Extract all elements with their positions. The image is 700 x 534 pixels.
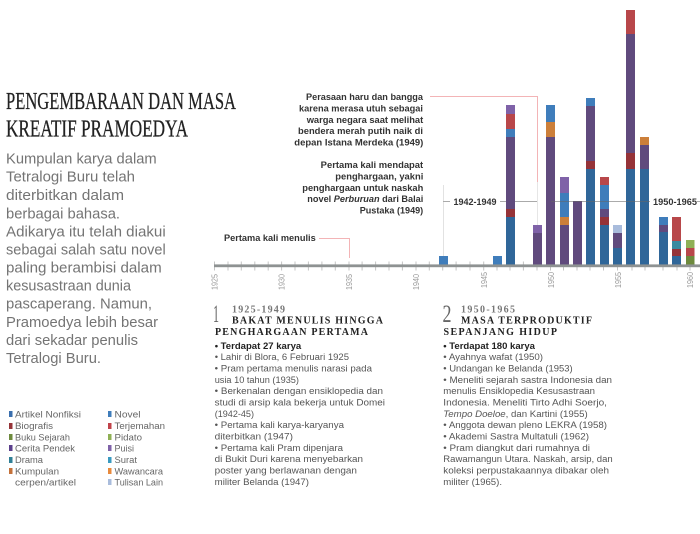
intro paragraph: dari sekadar penulis	[6, 332, 138, 349]
bullet list: period 2: • Akademi Sastra Multatuli (1962)	[443, 432, 589, 442]
heading: period 2: MASA TERPRODUKTIF	[461, 316, 592, 326]
heading: period 1: 1925-1949	[232, 304, 285, 316]
bullet list: period 1: • Pertama kali karya-karyanya	[215, 420, 345, 431]
range bracket: 1950-1965: 1950-1965	[653, 197, 698, 208]
legend: Cerita Pendek	[15, 444, 75, 454]
bullet list: period 2: • Terdapat 180 karya	[443, 341, 536, 352]
bullet list: period 1	[215, 341, 385, 488]
axis year labels: 1935	[344, 274, 354, 290]
bullet list: period 2: • Anggota dewan pleno LEKRA (1958)	[443, 420, 607, 431]
heading: period 2	[444, 304, 592, 338]
legend: Drama	[15, 455, 44, 466]
axis year labels	[210, 272, 695, 290]
intro paragraph: paling berambisi dalam	[6, 259, 162, 276]
bar 1960	[686, 240, 694, 265]
timeline tick marks	[214, 262, 690, 270]
legend: Pidato	[114, 432, 142, 444]
bar 1942	[439, 256, 448, 265]
range bracket: 1942-1949: 1942-1949	[454, 197, 496, 208]
intro paragraph: Tetralogi Buru telah	[6, 169, 135, 186]
bullet list: period 2: • Meneliti sejarah sastra Indonesia dan	[443, 375, 612, 386]
bar 1958	[659, 217, 668, 265]
legend: Artikel Nonfiksi	[15, 410, 81, 420]
intro paragraph: Kumpulan karya dalam	[6, 150, 157, 167]
bullet list: period 2: militer (1965).	[443, 477, 502, 488]
bullet list: period 1: militer Belanda (1947)	[215, 477, 309, 488]
intro paragraph: Adikarya itu telah diakui	[6, 223, 166, 240]
intro paragraph	[6, 150, 166, 367]
annotation: feeling proud 1949: depan Istana Merdeka (1949)	[294, 136, 423, 148]
legend: Puisi	[114, 444, 134, 454]
axis year labels: 1960	[685, 272, 695, 288]
legend: Tulisan Lain	[114, 478, 163, 488]
heading: period 1: PENGHARGAAN PERTAMA	[215, 327, 369, 338]
bar 1959	[672, 217, 681, 265]
axis year labels: 1925	[210, 274, 220, 290]
bullet list: period 2: • Ayahnya wafat (1950)	[443, 352, 543, 363]
legend	[9, 410, 165, 488]
bullet list: period 1: diterbitkan (1947)	[215, 432, 293, 442]
bullet list: period 2: menulis Ensiklopedia Kesusastraan	[443, 386, 595, 397]
timeline axis	[214, 264, 700, 267]
legend: Kumpulan	[15, 466, 59, 478]
bar 1949	[533, 225, 542, 265]
bullet list: period 2: koleksi perpustakaannya dibakar oleh	[443, 466, 609, 476]
annotation: feeling proud 1949: warga negara saat melihat	[306, 114, 423, 125]
intro paragraph: Tetralogi Buru.	[6, 350, 101, 367]
bullet list: period 1: poster yang berlawanan dengan	[215, 466, 357, 476]
title: PENGEMBARAAN DAN MASA	[6, 89, 236, 115]
bar 1956	[626, 10, 635, 265]
bullet list: period 2: • Undangan ke Belanda (1953)	[443, 364, 573, 374]
legend: Terjemahan	[114, 421, 165, 432]
bullet list: period 2: Rawamangun Utara. Naskah, arsip, dan	[443, 454, 613, 465]
bar chart: works per year	[210, 10, 700, 290]
axis year labels: 1955	[613, 272, 623, 288]
bar 1953	[586, 98, 595, 265]
bar 1947	[506, 105, 515, 265]
bullet list: period 1: • Terdapat 27 karya	[215, 341, 302, 352]
panel: period 1: 1	[213, 301, 219, 328]
annotation: first award 1949: Pertama kali mendapat	[321, 159, 423, 170]
annotation: first writing: Pertama kali menulis	[224, 232, 316, 243]
bar 1951	[560, 177, 569, 265]
intro paragraph: pascaperang. Namun,	[6, 296, 152, 313]
axis year labels: 1945	[479, 272, 489, 288]
legend: Surat	[114, 455, 137, 466]
intro paragraph: sebagai salah satu novel	[6, 241, 166, 258]
annotation: first award 1949	[302, 159, 424, 216]
annotation: first award 1949: penghargaan untuk naskah	[302, 182, 424, 193]
bar 1954	[600, 177, 609, 265]
annotation: feeling proud 1949: bendera merah putih naik di	[298, 125, 423, 136]
legend: cerpen/artikel	[15, 478, 76, 488]
legend: Biografis	[15, 421, 53, 432]
bullet list: period 2	[443, 341, 613, 488]
intro paragraph: diterbitkan dalam	[6, 187, 124, 204]
axis year labels: 1940	[411, 274, 421, 290]
annotation: first award 1949: penghargaan, yakni	[335, 170, 423, 181]
heading: period 2: 1950-1965	[461, 304, 515, 316]
intro paragraph: Pramoedya lebih besar	[6, 314, 158, 331]
bullet list: period 2: Indonesia. Meneliti Tirto Adhi Soerjo,	[443, 398, 607, 408]
bullet list: period 1: di Bukit Duri karena menyebarkan	[215, 454, 363, 465]
bar 1950	[546, 105, 555, 265]
bar 1952	[573, 201, 582, 265]
legend: Novel	[114, 410, 140, 420]
axis year labels: 1930	[276, 274, 286, 290]
bullet list: period 1: studi di arsip kala bekerja untuk Domei	[215, 398, 385, 408]
heading: period 2: SEPANJANG HIDUP	[444, 327, 557, 338]
bullet list: period 1: • Berkenalan dengan ensiklopedia dan	[215, 386, 383, 397]
annotation: feeling proud 1949: karena merasa utuh sebagai	[299, 102, 423, 114]
bullet list: period 2: • Pram diangkut dari rumahnya di	[443, 443, 590, 454]
title: KREATIF PRAMOEDYA	[6, 116, 188, 142]
legend: Wawancara	[114, 466, 164, 478]
bullet list: period 1: (1942-45)	[215, 409, 254, 420]
bullet list: period 1: • Pertama kali Pram dipenjara	[215, 443, 344, 454]
leader line: 1949	[430, 96, 538, 264]
heading: period 1: BAKAT MENULIS HINGGA	[232, 316, 384, 326]
annotation: first award 1949: Pustaka (1949)	[360, 204, 423, 216]
bullet list: period 2: Tempo Doeloe, dan Kartini (1955)	[443, 409, 588, 420]
bar 1946	[493, 256, 502, 265]
bar 1957	[640, 137, 649, 265]
range bracket: 1942-1949	[443, 185, 537, 256]
title	[6, 89, 236, 142]
bullet list: period 1: usia 10 tahun (1935)	[215, 375, 299, 386]
bullet list: period 1: • Pram pertama menulis narasi pada	[215, 364, 373, 374]
intro paragraph: berbagai bahasa.	[6, 205, 120, 222]
numeral 2: 2	[442, 301, 452, 328]
annotation: feeling proud 1949: Perasaan haru dan bangga	[306, 91, 424, 102]
panel: period 2	[442, 301, 613, 488]
panel: period 1	[213, 301, 385, 488]
annotation: feeling proud 1949	[294, 91, 424, 148]
axis year labels: 1950	[546, 272, 556, 288]
bullet list: period 1: • Lahir di Blora, 6 Februari 1925	[215, 352, 349, 363]
leader line: 1935	[319, 238, 350, 258]
annotation: first award 1949: novel Perburuan dari Balai	[307, 193, 423, 204]
legend: Buku Sejarah	[15, 432, 70, 444]
bar 1955	[613, 225, 622, 265]
intro paragraph: kesusastraan dunia	[6, 278, 132, 295]
heading: period 1	[215, 304, 384, 338]
